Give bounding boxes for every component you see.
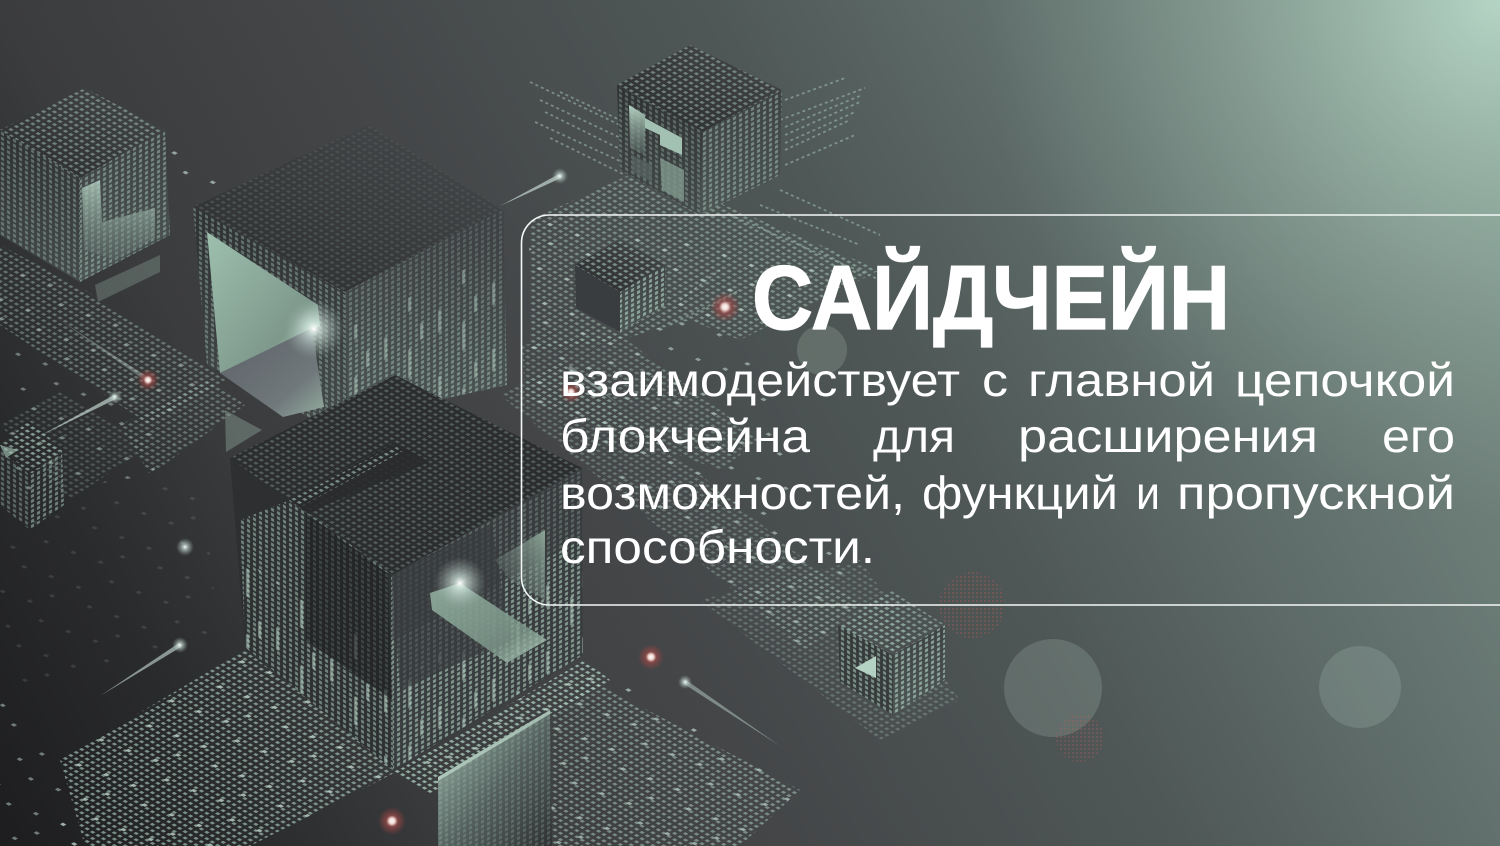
floor grid of dotted bands <box>0 170 960 846</box>
sparse bright dots <box>0 150 880 846</box>
body text: его <box>1382 410 1455 462</box>
lit cutouts: top right cube <box>629 105 684 202</box>
glow points <box>108 168 740 835</box>
light streaks <box>40 174 780 746</box>
text panel outline <box>522 215 1500 605</box>
body text: способности. <box>560 521 875 573</box>
body text: блокчейна <box>560 410 810 462</box>
cube: large lower <box>230 375 583 770</box>
body text: с <box>982 354 1008 406</box>
body text: цепочкой <box>1235 354 1455 406</box>
body text: взаимодействует <box>560 354 960 406</box>
body text: главной <box>1028 354 1215 406</box>
lit window: large upper cube <box>207 232 344 417</box>
body text: и <box>1136 467 1160 519</box>
body text: для <box>873 410 955 462</box>
cube: small center <box>575 240 665 332</box>
lit slab near left cube <box>95 255 160 302</box>
cube: lower lit box <box>438 710 552 846</box>
data streak lines: upper cube <box>530 78 880 325</box>
cube: left <box>0 88 170 282</box>
cube: top right <box>617 45 782 215</box>
title: САЙДЧЕЙН <box>752 246 1230 349</box>
translucent circles <box>797 325 1401 762</box>
lit panels: large lower cube <box>430 530 547 663</box>
body text <box>560 354 1455 573</box>
cube: large upper <box>193 125 507 428</box>
body text: функций <box>922 467 1118 519</box>
cube: small lower right <box>838 590 945 715</box>
cube: small left <box>0 420 64 530</box>
body text: расширения <box>1018 410 1318 462</box>
lit L-shape: left cube <box>82 180 155 260</box>
body text: пропускной <box>1177 467 1455 519</box>
lit dark slab beneath upper cube <box>225 410 262 452</box>
body text: возможностей, <box>560 467 905 519</box>
